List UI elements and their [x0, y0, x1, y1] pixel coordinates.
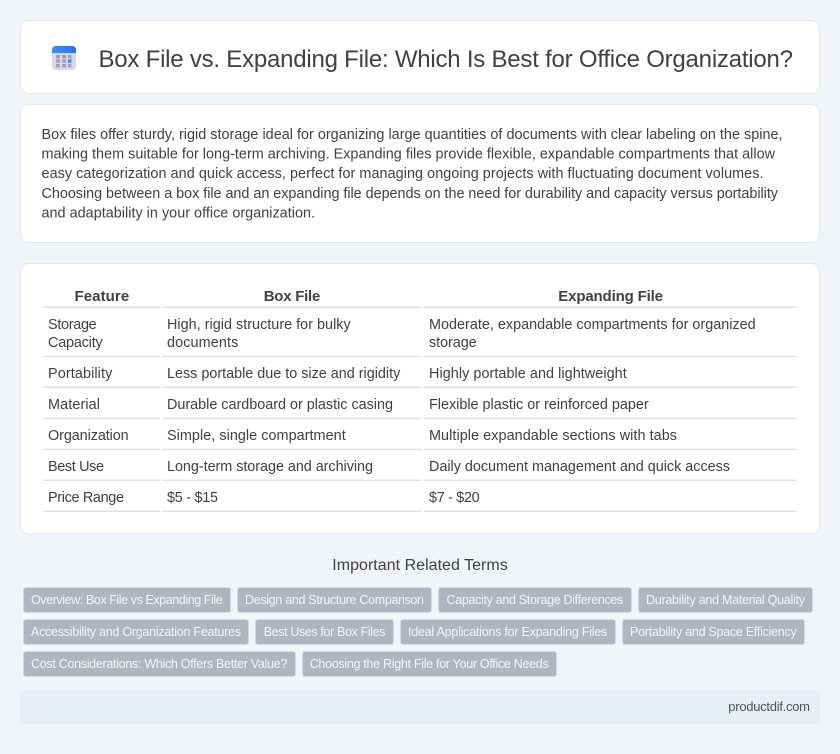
tag: ideal applications: Ideal Applications for Expanding Files: [408, 625, 607, 639]
tag list: related terms: [24, 588, 812, 676]
table row: storage capacity: Storage: [48, 317, 97, 333]
title: Box File vs. Expanding File: Which Is Best for Office Organization?: [98, 46, 793, 73]
tag: design and structure: [238, 588, 432, 612]
tag: ideal applications: [400, 620, 616, 644]
table header row: Box File: [264, 288, 320, 305]
tag: portability and space: [622, 620, 804, 644]
table row: best use: [43, 459, 797, 481]
table row: portability: Highly portable and lightweight: [429, 366, 627, 382]
table row: portability: Portability: [48, 366, 113, 382]
tag: choosing the right file: Choosing the Right File for Your Office Needs: [310, 657, 549, 671]
table row: material: Flexible plastic or reinforced paper: [429, 397, 649, 413]
table row: storage capacity: documents: [167, 335, 238, 351]
tag: portability and space: Portability and Space Efficiency: [630, 625, 797, 639]
footer bar: [20, 690, 820, 724]
table row: storage capacity: High, rigid structure for bulky: [167, 317, 351, 333]
text block: introduction: [42, 127, 782, 221]
table row: storage capacity: [43, 317, 797, 357]
table row: best use: Long-term storage and archiving: [167, 459, 373, 475]
table header row: [43, 288, 797, 308]
tag: capacity and storage: Capacity and Storage Differences: [446, 593, 623, 607]
tag: design and structure: Design and Structure Comparison: [245, 593, 424, 607]
tag: durability and material: [638, 588, 812, 612]
table header row: Feature: [74, 288, 129, 305]
table row: price range: $7 - $20: [429, 490, 480, 506]
table row: material: Material: [48, 397, 100, 413]
table row: best use: Best Use: [48, 459, 104, 475]
table row: price range: $5 - $15: [167, 490, 218, 506]
tag: cost considerations: Cost Considerations: Which Offers Better Value?: [31, 657, 287, 671]
table row: organization: Organization: [48, 428, 129, 444]
table row: storage capacity: storage: [429, 335, 477, 351]
table row: material: Durable cardboard or plastic casing: [167, 397, 393, 413]
table row: portability: [43, 366, 797, 388]
text block: introduction: and adaptability in your office organization.: [42, 205, 315, 221]
text block: introduction: Box files offer sturdy, rigid storage ideal for organizing large quantities of documents with clear labeling on the spine,: [42, 127, 782, 143]
table row: price range: Price Range: [48, 490, 124, 506]
table row: material: [43, 397, 797, 419]
icon: calendar: [52, 46, 76, 70]
tag: best uses: Best Uses for Box Files: [264, 625, 385, 639]
heading: important related terms: Important Related Terms: [332, 557, 508, 574]
table row: organization: Simple, single compartment: [167, 428, 346, 444]
panel: header: [20, 20, 820, 94]
tag: choosing the right file: [302, 652, 556, 676]
table row: price range: [43, 490, 797, 512]
text block: introduction: making them suitable for long-term archiving. Expanding files provide flexible, expandable compartments that allow: [42, 147, 776, 163]
tag: best uses: [256, 620, 394, 644]
panel: introduction: [20, 104, 820, 242]
text block: introduction: Choosing between a box file and an expanding file depends on the need for durability and capacity versus portability: [42, 186, 779, 202]
table row: storage capacity: Capacity: [48, 335, 103, 351]
panel: comparison table: [20, 264, 820, 534]
table row: portability: Less portable due to size and rigidity: [167, 366, 401, 382]
tag: capacity and storage: [438, 588, 632, 612]
tag: cost considerations: [24, 652, 296, 676]
table row: organization: [43, 428, 797, 450]
tag: accessibility: Accessibility and Organization Features: [31, 625, 241, 639]
tag: accessibility: [24, 620, 248, 644]
tag: durability and material: Durability and Material Quality: [646, 593, 806, 607]
table row: organization: Multiple expandable sections with tabs: [429, 428, 677, 444]
tag: overview: Overview: Box File vs Expanding File: [31, 593, 223, 607]
table header row: Expanding File: [558, 288, 663, 305]
text block: introduction: easy categorization and quick access, perfect for managing ongoing projects with fluctuating document volumes.: [42, 166, 764, 182]
table row: best use: Daily document management and quick access: [429, 459, 730, 475]
footer source label: productdif.com: [728, 699, 810, 714]
table row: storage capacity: Moderate, expandable compartments for organized: [429, 317, 756, 333]
tag: overview: [24, 588, 230, 612]
